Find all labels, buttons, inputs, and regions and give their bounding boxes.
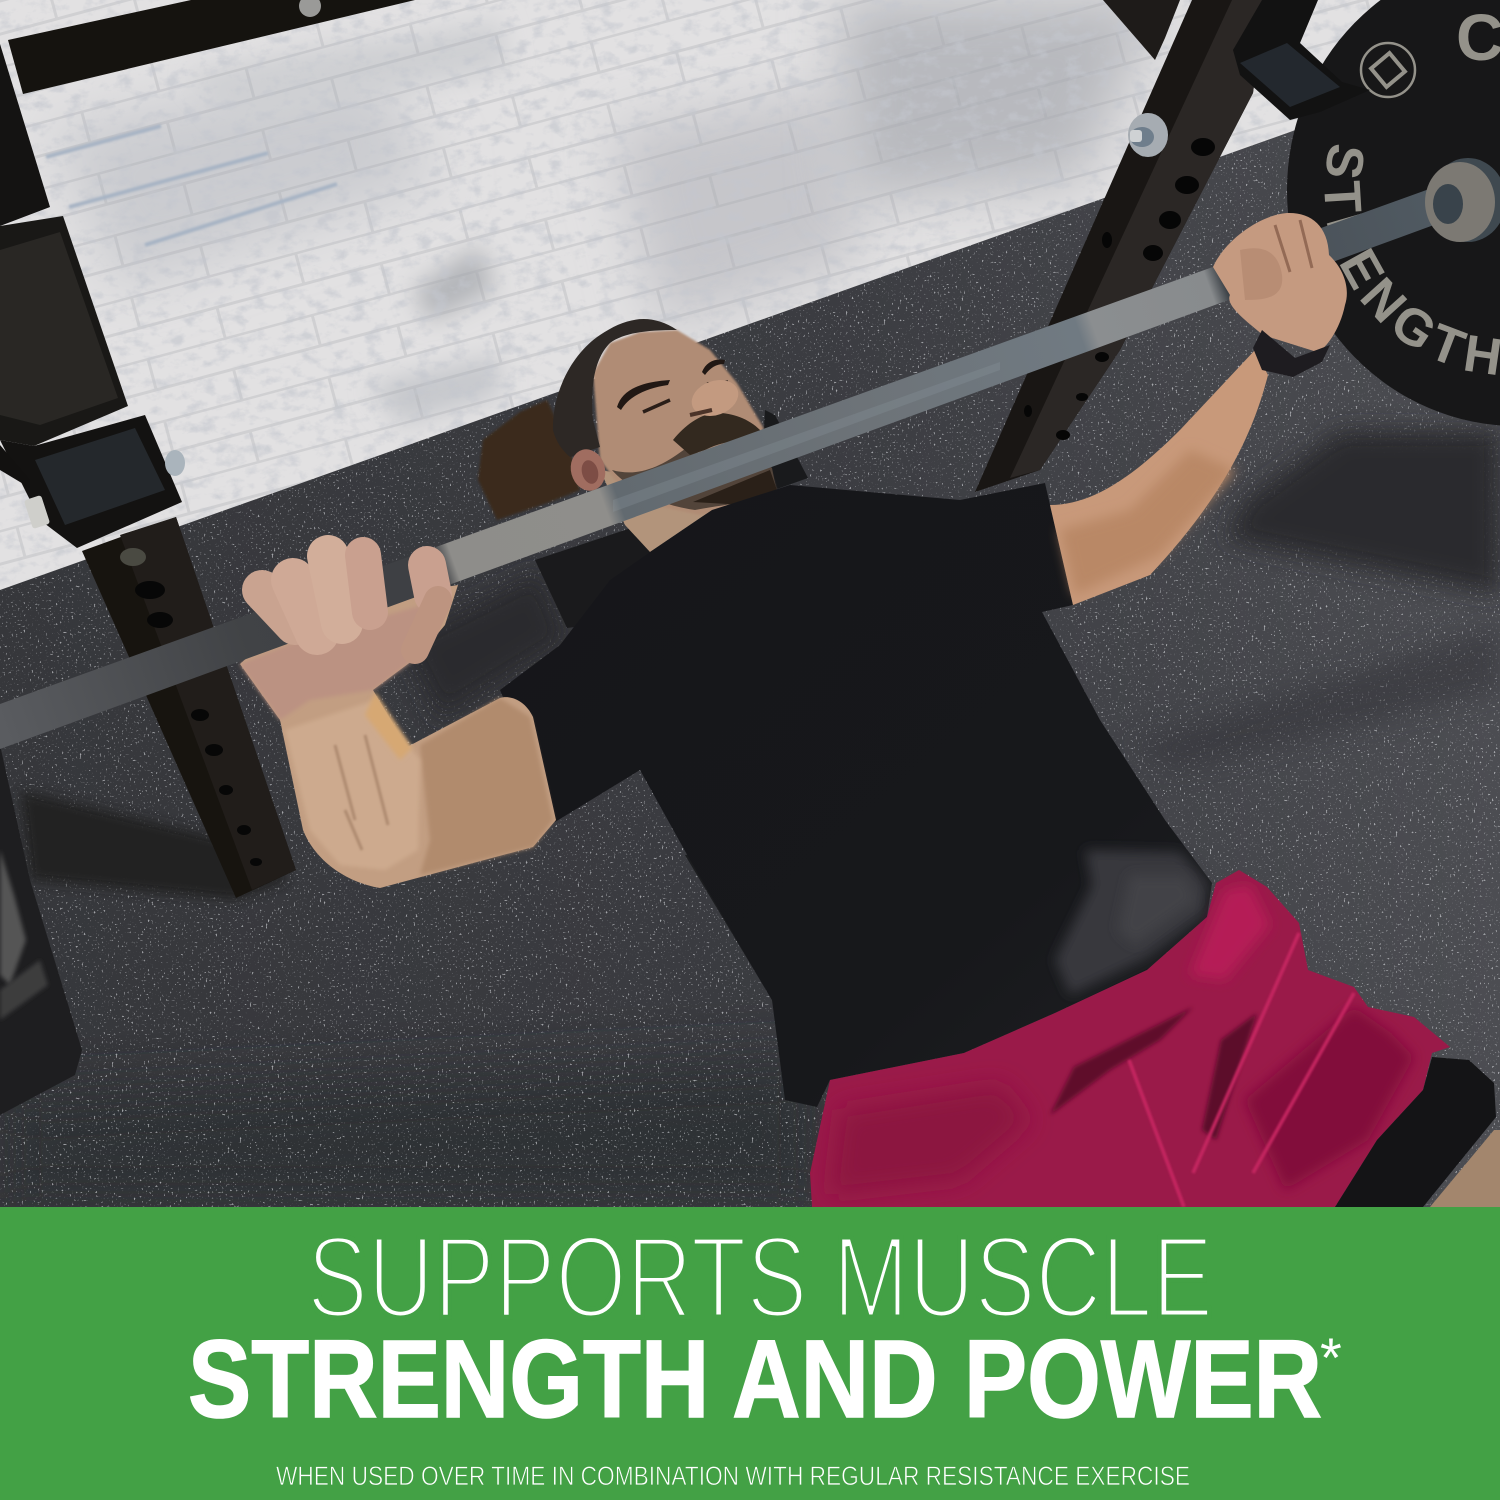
right rack upright [975,0,1265,492]
weight plate left [0,745,82,1115]
brick wall [0,0,1500,600]
left hand fingers and thumb [262,555,438,650]
heading line 2: STRENGTH AND POWER [188,1318,1322,1441]
barbell [0,188,1442,749]
asterisk: * [1320,1326,1342,1389]
ponytail [478,400,580,520]
head [553,319,778,515]
floor [0,130,1500,1207]
left rack column [0,44,296,898]
shorts [810,870,1450,1207]
floor shadows [20,430,1500,900]
right arm [1050,350,1268,605]
weight plate right [1287,0,1500,426]
subline: WHEN USED OVER TIME IN COMBINATION WITH REGULAR RESISTANCE EXERCISE [276,1461,1190,1491]
thigh [1430,1130,1500,1207]
green banner [0,1207,1500,1500]
j-cup on right rack [1233,0,1370,120]
bolts on left rack [24,450,185,529]
right hand [1213,213,1347,352]
shirt [500,483,1212,1107]
left rack brace [8,0,415,94]
bolt on right rack [1128,113,1168,157]
wristband [1253,330,1330,377]
barbell collar [1425,158,1500,242]
neck [600,470,720,552]
heading line 1: SUPPORTS MUSCLE [307,1212,1213,1342]
bench [535,410,808,1080]
left arm [240,585,556,888]
compression shorts [1335,1057,1496,1207]
